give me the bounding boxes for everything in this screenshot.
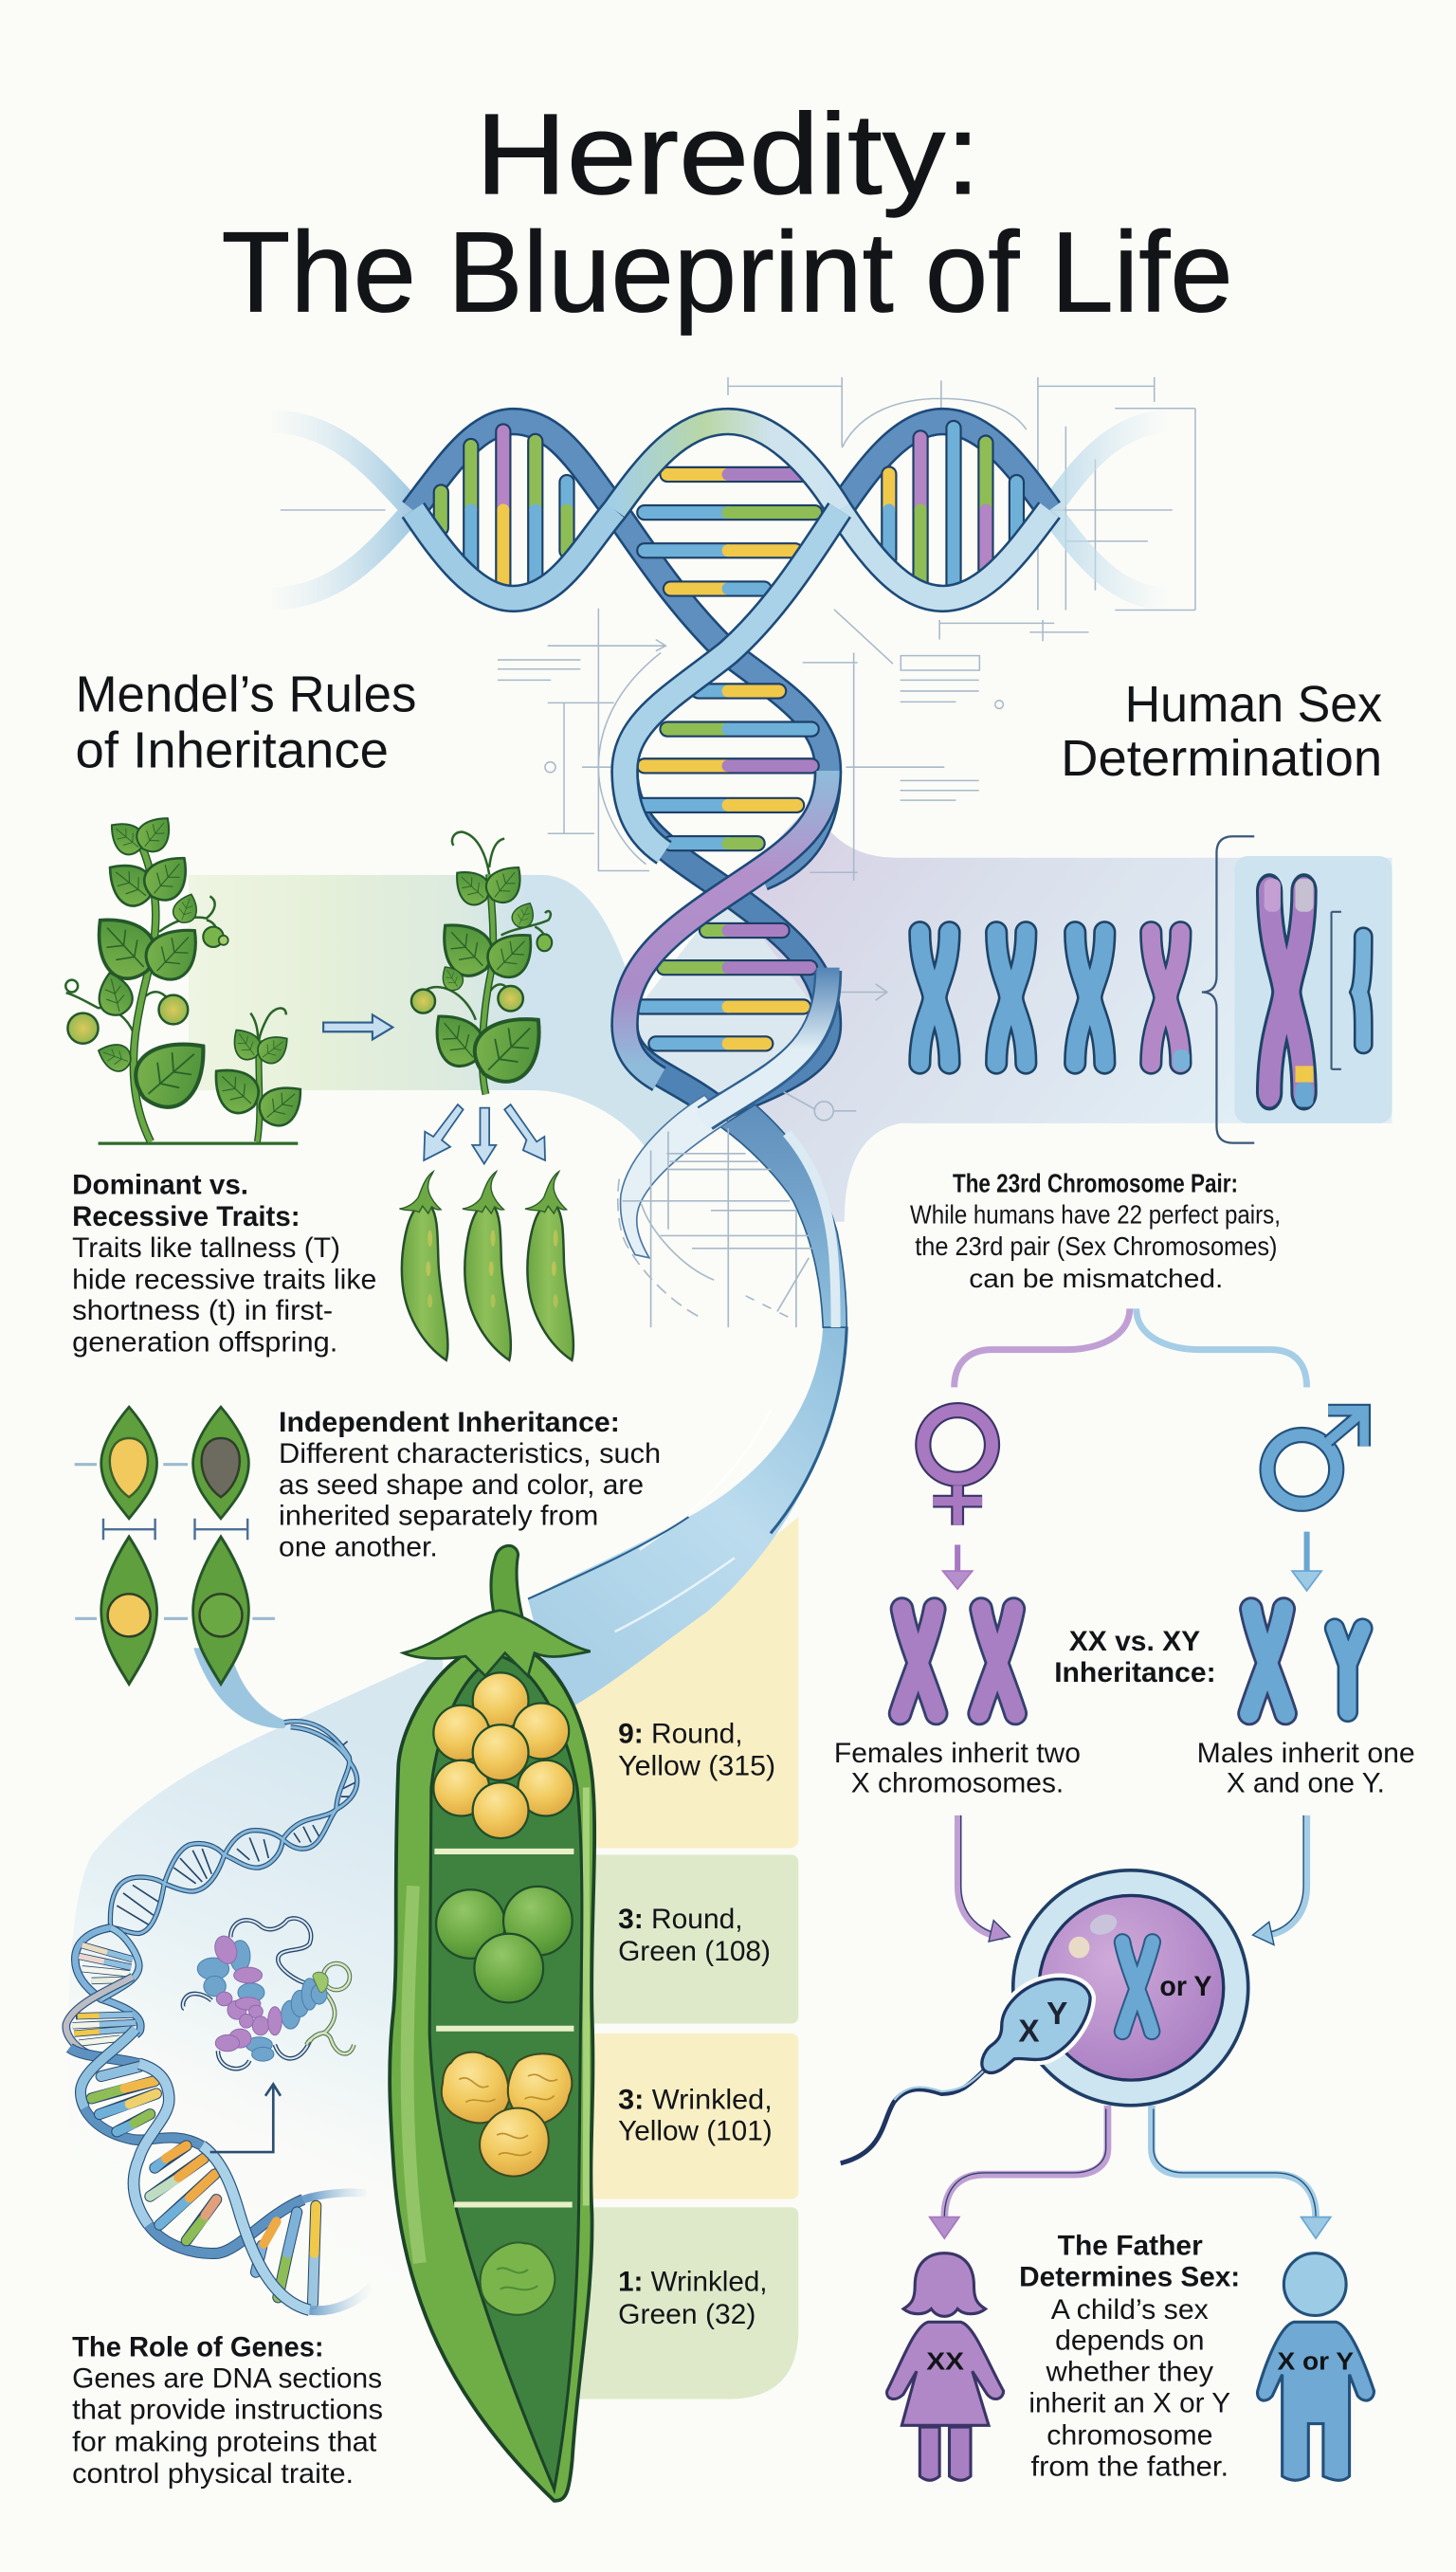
label 9	[618, 1719, 775, 1782]
strand ends: left fade	[270, 422, 413, 598]
back strands	[69, 2048, 367, 2253]
label 3 wrinkled yellow	[618, 2084, 773, 2146]
icon: sperm: X	[1018, 2014, 1040, 2049]
text: father determines sex	[1019, 2230, 1240, 2482]
text: 23rd chromosome pair: the 23rd pair (Sex Chromosomes)	[915, 1231, 1277, 1261]
arrows: symbols to chromosomes	[943, 1532, 1321, 1591]
plants and pods group	[65, 809, 573, 1360]
icon: protein	[183, 1918, 354, 2069]
text: role of genes: for making proteins that	[72, 2426, 376, 2457]
text: ratio labels	[618, 1719, 775, 2330]
text: females: Females inherit two	[834, 1738, 1081, 1769]
highlighted X chromosome	[1265, 879, 1314, 1107]
wrinkled green pea	[481, 2242, 555, 2315]
panel: gene background	[68, 1653, 443, 2362]
text: role of genes: that provide instructions	[72, 2394, 383, 2425]
round yellow peas	[433, 1672, 573, 1838]
front strand: purple	[625, 771, 828, 1079]
ribbon: DNA sweep to pea pod	[528, 1326, 846, 1715]
arrows: plant to pods	[424, 1104, 545, 1164]
text: males: X and one Y.	[1227, 1768, 1385, 1799]
title: The Blueprint of Life	[222, 208, 1233, 337]
icon: XX chromosomes	[901, 1609, 1015, 1713]
rungs	[441, 429, 1016, 1044]
text: 23rd chromosome pair	[910, 1169, 1281, 1293]
pod body	[390, 1640, 594, 2501]
DNA double helix	[270, 422, 1168, 1108]
text: females	[834, 1738, 1081, 1799]
label 9: Yellow (315)	[618, 1751, 775, 1782]
text: XX vs XY: XX vs. XY	[1069, 1626, 1201, 1657]
text: dominant vs recessive: Recessive Traits:	[72, 1201, 300, 1232]
heading: Mendel's Rules: of Inheritance	[76, 722, 389, 779]
dividers	[434, 1851, 573, 2204]
wrinkled yellow peas	[442, 2052, 572, 2177]
label 1: Green (32)	[618, 2299, 755, 2330]
left loop rungs	[441, 431, 567, 591]
text: father determines sex: A child’s sex	[1051, 2294, 1209, 2326]
text: XX vs XY: Inheritance:	[1054, 1657, 1216, 1688]
front strand: across top	[413, 422, 1049, 598]
icon: large pea pod	[390, 1545, 594, 2501]
icon: girl: XX	[926, 2349, 965, 2376]
text: 23rd chromosome pair: The 23rd Chromosome Pair:	[953, 1169, 1238, 1198]
text: 23rd chromosome pair: While humans have 22 perfect pairs,	[910, 1199, 1281, 1229]
light stripe	[787, 1133, 836, 1327]
text: role of genes: Genes are DNA sections	[72, 2363, 382, 2395]
icon: egg cell: or Y	[1159, 1971, 1212, 2002]
text: dominant vs recessive: hide recessive traits like	[72, 1264, 376, 1295]
chromosomes row	[919, 932, 1190, 1071]
arrows: into egg	[958, 1815, 1306, 1945]
centre loop rungs	[645, 474, 815, 589]
small Y chromosome	[1332, 912, 1363, 1069]
panel: loop interior tint	[625, 892, 828, 1108]
back strands	[413, 422, 1049, 1108]
heading: Mendel's Rules	[76, 666, 416, 779]
upper vertical rungs	[641, 691, 811, 844]
label 3 round green: Green (108)	[618, 1936, 771, 1967]
icon: sperm: Y	[1046, 1997, 1067, 2032]
text: independent inheritance: Different characteristics, such	[279, 1438, 661, 1469]
pod interior	[429, 1656, 582, 2490]
protein blue coils	[197, 1941, 327, 2061]
icon: girl	[887, 2253, 1004, 2480]
text: father determines sex: chromosome	[1046, 2419, 1212, 2451]
lower vertical rungs	[641, 930, 810, 1044]
text: independent inheritance: inherited separately from	[279, 1501, 598, 1532]
icon: egg cell	[1013, 1870, 1248, 2106]
text: males: Males inherit one	[1197, 1738, 1415, 1769]
round green peas	[436, 1887, 573, 2002]
text: males	[1197, 1738, 1415, 1799]
stem and calyx	[404, 1545, 591, 1676]
protein tube	[183, 1918, 354, 2069]
text: independent inheritance: Independent Inheritance:	[279, 1407, 620, 1438]
text: father determines sex: inherit an X or Y	[1028, 2387, 1230, 2418]
icon: three pea pods	[399, 1172, 573, 1360]
text: dominant vs recessive: Traits like tallness (T)	[72, 1232, 340, 1264]
text: father determines sex: Determines Sex:	[1019, 2261, 1240, 2292]
small DNA thin strands	[110, 1722, 357, 1933]
blueprint lines under strand	[618, 1092, 856, 1327]
heading: Mendel's Rules: Mendel’s Rules	[76, 666, 416, 723]
icon: offspring plant	[411, 832, 558, 1094]
text: role of genes: The Role of Genes:	[72, 2331, 324, 2362]
small DNA lower helix	[69, 2029, 373, 2310]
text: dominant vs recessive: shortness (t) in first-	[72, 1295, 333, 1326]
text: XX vs XY	[1054, 1626, 1216, 1688]
arrow: plant to offspring	[323, 1014, 392, 1039]
icon: male symbol	[1267, 1411, 1364, 1504]
heading: Human Sex Determination	[1061, 676, 1382, 787]
icon: sperm	[841, 1979, 1090, 2163]
label 3 wrinkled yellow: 3: Wrinkled,	[618, 2084, 773, 2115]
icon: tall and short pea plants	[65, 809, 312, 1143]
ribbon: lower dark strand and translucent strand	[618, 1092, 856, 1327]
title	[222, 89, 1233, 337]
blueprint annotation lines	[281, 377, 1195, 1000]
label 3 wrinkled yellow: Yellow (101)	[618, 2115, 773, 2146]
label 1: 1: Wrinkled,	[618, 2266, 768, 2297]
arrows: egg to children	[930, 2106, 1331, 2238]
text: role of genes: control physical traite.	[72, 2458, 354, 2490]
text: dominant vs recessive	[72, 1169, 376, 1358]
text: role of genes	[72, 2331, 383, 2490]
panel: 9 round yellow	[557, 1517, 798, 1848]
egg and sperm group	[841, 1870, 1248, 2163]
panel: plant background band	[189, 875, 728, 1151]
icon: boy	[1258, 2253, 1374, 2480]
label 1	[618, 2266, 768, 2330]
branch: to female and male	[955, 1308, 1307, 1387]
front strands	[81, 2029, 373, 2310]
panel: 3 wrinkled yellow	[573, 2034, 798, 2199]
panel: 1 wrinkled green	[566, 2207, 798, 2399]
heading: Human Sex Determination: Determination	[1061, 730, 1382, 787]
icon: boy: X or Y	[1277, 2349, 1354, 2376]
translucent lower strand	[621, 1095, 728, 1258]
small DNA upper rungs	[117, 1740, 355, 1924]
protein purple coils	[211, 1933, 282, 2052]
text: dominant vs recessive: generation offspring.	[72, 1326, 337, 1358]
text: dominant vs recessive: Dominant vs.	[72, 1169, 248, 1200]
text: independent inheritance: one another.	[279, 1532, 438, 1563]
panel: chromosome background band	[717, 804, 1392, 1222]
protein green cap	[313, 1972, 328, 1993]
text: father determines sex: The Father	[1058, 2230, 1203, 2261]
strand ends: right fade	[1049, 422, 1168, 598]
panel: 3 round green	[573, 1854, 798, 2024]
text: father determines sex: from the father.	[1030, 2451, 1228, 2482]
label 3 round green	[618, 1904, 771, 1967]
chromosome bracket	[1202, 836, 1254, 1143]
dark strand	[720, 1104, 846, 1327]
text: father determines sex: whether they	[1046, 2357, 1213, 2388]
front strand: descending blue	[625, 510, 840, 853]
icon: female symbol	[923, 1411, 992, 1525]
front strand: pale crossing	[701, 968, 828, 1120]
label 9: 9: Round,	[618, 1719, 743, 1750]
text: females: X chromosomes.	[851, 1768, 1064, 1799]
icon: seed crosses	[75, 1407, 275, 1684]
text: 23rd chromosome pair: can be mismatched.	[969, 1264, 1223, 1293]
arrow: gene to protein	[210, 2084, 281, 2152]
text: father determines sex: depends on	[1055, 2326, 1204, 2357]
small DNA middle loops	[66, 1927, 140, 2057]
heading: Human Sex Determination: Human Sex	[1125, 676, 1382, 733]
right loop rungs	[889, 429, 1016, 589]
title: Heredity:	[476, 89, 980, 218]
panel: highlighted chromosome pair	[1234, 856, 1392, 1123]
ribbon: tail to small DNA	[193, 1648, 290, 1728]
text: independent inheritance: as seed shape and color, are	[279, 1469, 644, 1501]
label 3 round green: 3: Round,	[618, 1904, 743, 1935]
text: independent inheritance	[279, 1407, 661, 1563]
icon: XY chromosomes	[1249, 1609, 1362, 1713]
large rungs	[92, 2067, 316, 2304]
rung outlines	[441, 429, 1016, 1044]
small DNA, protein and arrow group	[66, 1722, 373, 2310]
